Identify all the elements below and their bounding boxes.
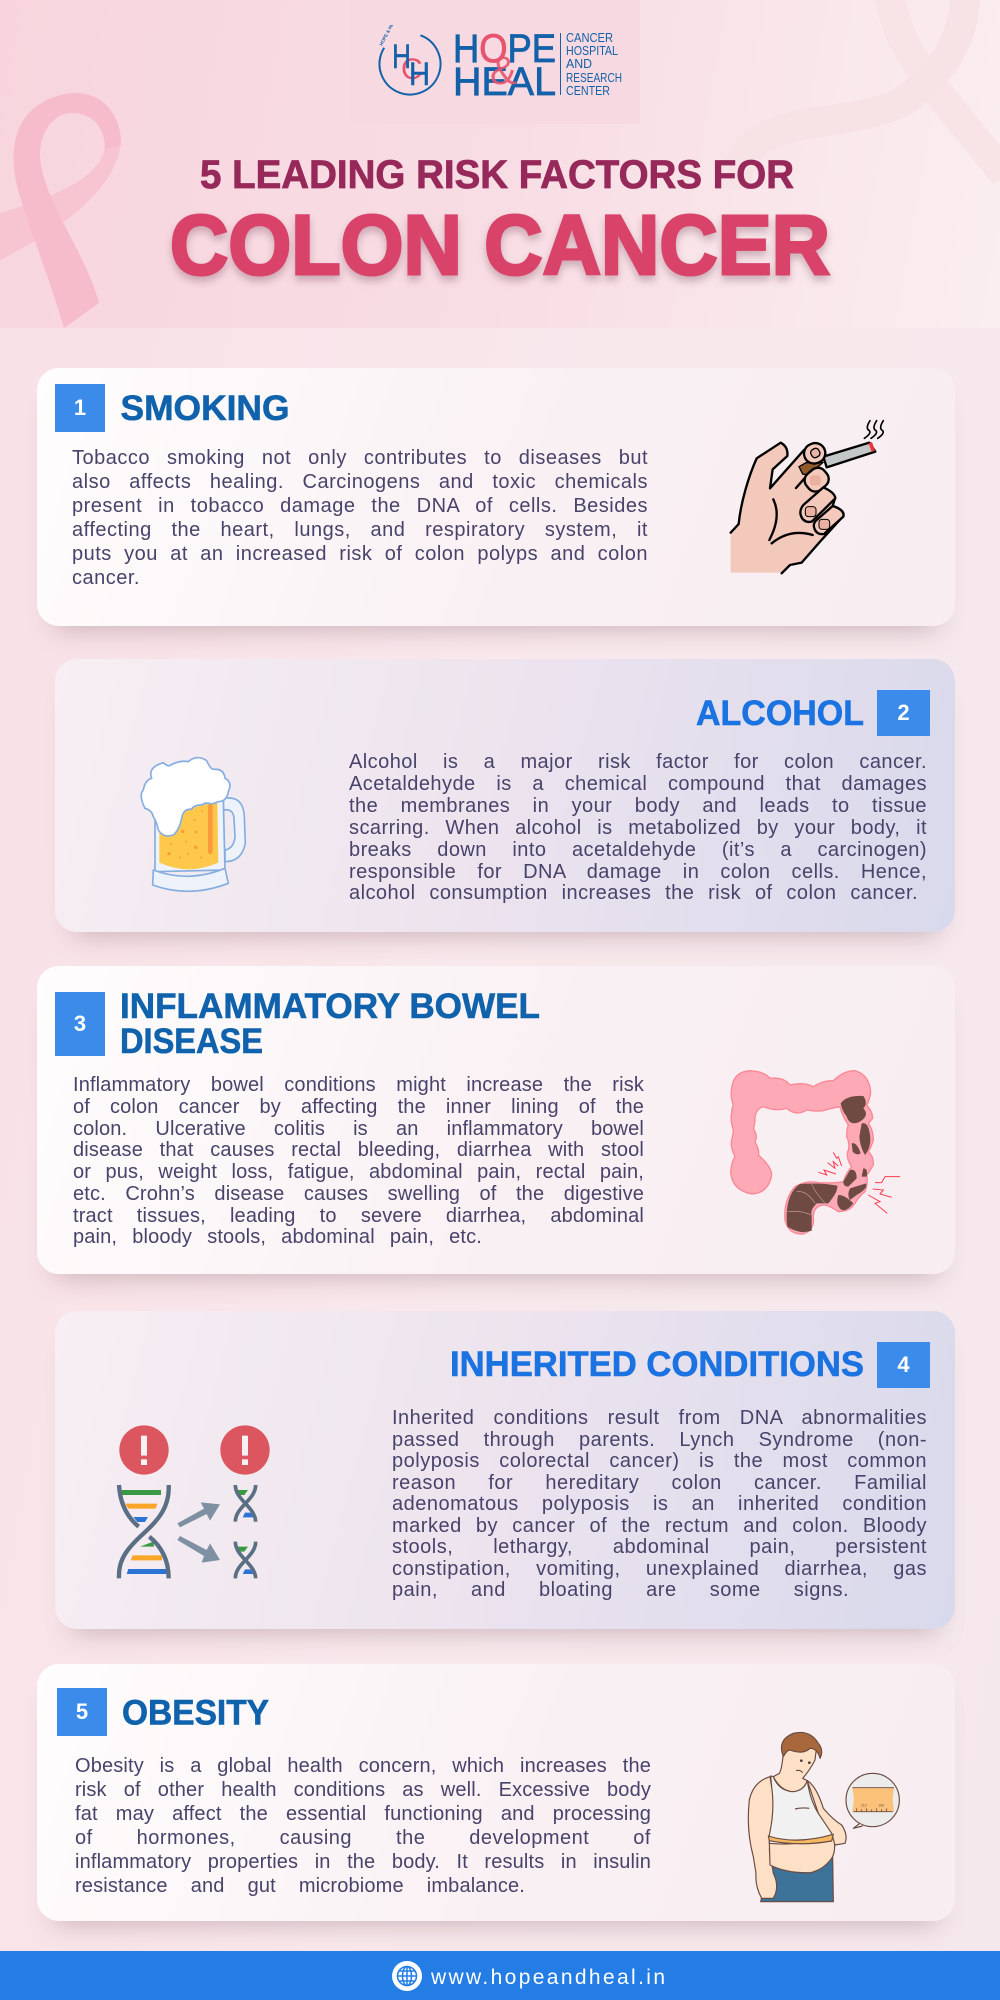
logo: & (490, 49, 517, 93)
body text: Tobacco smoking not only contributes to diseases but (72, 447, 648, 469)
heading: inherited conditions: INHERITED CONDITIONS (450, 1345, 864, 1384)
number badge 4 (877, 1342, 930, 1388)
heading: smoking: SMOKING (120, 389, 290, 428)
body text: polyposis colorectal cancer) is the most common (392, 1450, 927, 1472)
logo: HOPE (453, 27, 556, 71)
body text: disease that causes rectal bleeding, diarrhea with stool (73, 1139, 644, 1161)
logo: AND (566, 57, 592, 71)
panel: alcohol (55, 659, 955, 932)
body text: of hormones, causing the development of (75, 1827, 651, 1849)
logo panel background (350, 0, 640, 124)
icon: colon with inflammation (730, 1070, 900, 1235)
number badge 5 (57, 1688, 107, 1736)
body text: colon. Ulcerative colitis is an inflammatory bowel (73, 1118, 644, 1140)
logo: RESEARCH (566, 71, 622, 85)
title: 5 LEADING RISK FACTORS FOR (200, 153, 794, 197)
icon: hand holding cigarette (729, 420, 884, 575)
heading: inflammatory bowel disease: INFLAMMATORY BOWEL (120, 987, 540, 1026)
number badge 2: 2 (897, 700, 910, 725)
panel: inherited conditions (55, 1311, 955, 1629)
logo: CANCER (566, 31, 613, 45)
header banner (0, 0, 1000, 328)
icon: DNA mutation (116, 1425, 270, 1578)
body text: resistance and gut microbiome imbalance. (75, 1875, 525, 1897)
body text: responsible for DNA damage in colon cells. Hence, (349, 861, 927, 883)
body text: adenomatous polyposis is an inherited condition (392, 1493, 927, 1515)
panel: smoking (37, 368, 955, 626)
icon: globe (392, 1961, 422, 1991)
logo: H (392, 38, 411, 76)
logo: CENTER (566, 84, 610, 98)
body text (392, 1407, 927, 1601)
footer bar (0, 1951, 1000, 2000)
logo (378, 25, 622, 104)
body text: pain, and bloating are some signs. (392, 1579, 849, 1601)
body text: Alcohol is a major risk factor for colon cancer. (349, 751, 927, 773)
body text: tract tissues, leading to severe diarrhea, abdominal (73, 1204, 644, 1226)
number badge 1: 1 (74, 395, 86, 420)
body text (72, 447, 648, 589)
decorative ribbons (0, 0, 1000, 328)
body text: cancer. (72, 567, 140, 589)
body text: pain, bloody stools, abdominal pain, etc. (73, 1226, 482, 1248)
body text: risk of other health conditions as well. Excessive body (75, 1779, 651, 1801)
heading: inflammatory bowel disease (120, 987, 540, 1061)
number badge 3 (55, 992, 105, 1056)
body text: marked by cancer of the rectum and colon. Bloody (392, 1514, 927, 1536)
body text: passed through parents. Lynch Syndrome (non- (392, 1428, 927, 1450)
number badge 1 (55, 384, 105, 432)
icon: man measuring waist (748, 1732, 900, 1902)
body text (349, 751, 927, 904)
body text: puts you at an increased risk of colon polyps and colon (72, 543, 648, 565)
body text: etc. Crohn’s disease causes swelling of the digestive (73, 1183, 644, 1205)
number badge 3: 3 (74, 1011, 86, 1036)
icon: man measuring waist: 200 (879, 1803, 884, 1807)
logo: H (409, 56, 430, 92)
body text: reason for hereditary colon cancer. Familial (392, 1472, 927, 1494)
body text: stools, lethargy, abdominal pain, persistent (392, 1536, 927, 1558)
number badge 5: 5 (76, 1699, 88, 1724)
body text: fat may affect the essential functioning and processing (75, 1803, 651, 1825)
body text: inflammatory properties in the body. It results in insulin (75, 1851, 651, 1873)
heading: obesity: OBESITY (122, 1694, 269, 1732)
body text: breaks down into acetaldehyde (it’s a carcinogen) (349, 839, 927, 861)
panel: obesity (37, 1664, 955, 1921)
body text: affecting the heart, lungs, and respiratory system, it (72, 519, 648, 541)
body text: alcohol consumption increases the risk of colon cancer. (349, 882, 918, 904)
heading: alcohol: ALCOHOL (696, 694, 864, 733)
panel: inflammatory bowel disease (37, 966, 955, 1274)
body text: scarring. When alcohol is metabolized by your body, it (349, 817, 927, 839)
logo: HEAL (453, 60, 556, 104)
icon: man measuring waist: 210 (861, 1803, 867, 1807)
body text: also affects healing. Carcinogens and toxic chemicals (72, 471, 648, 493)
logo: C (401, 53, 423, 86)
number badge 2 (877, 690, 930, 736)
website address: www.hopeandheal.in (430, 1966, 665, 1989)
body text: or pus, weight loss, fatigue, abdominal pain, rectal pain, (73, 1161, 644, 1183)
title (168, 153, 832, 292)
body text: Obesity is a global health concern, which increases the (75, 1755, 651, 1777)
body text: constipation, vomiting, unexplained diarrhea, gas (392, 1558, 927, 1580)
body text: Inherited conditions result from DNA abnormalities (392, 1407, 927, 1429)
body text (73, 1074, 644, 1248)
body text: Acetaldehyde is a chemical compound that damages (349, 773, 927, 795)
body text (75, 1755, 651, 1897)
body text: of colon cancer by affecting the inner lining of the (73, 1096, 644, 1118)
title: COLON CANCER (170, 198, 830, 292)
icon: beer mug (140, 756, 246, 892)
number badge 4: 4 (897, 1352, 910, 1377)
heading: inflammatory bowel disease: DISEASE (120, 1022, 263, 1061)
logo: HOSPITAL (566, 44, 618, 58)
body text: Inflammatory bowel conditions might increase the risk (73, 1074, 644, 1096)
body text: the membranes in your body and leads to tissue (349, 795, 927, 817)
body text: present in tobacco damage the DNA of cells. Besides (72, 495, 648, 517)
